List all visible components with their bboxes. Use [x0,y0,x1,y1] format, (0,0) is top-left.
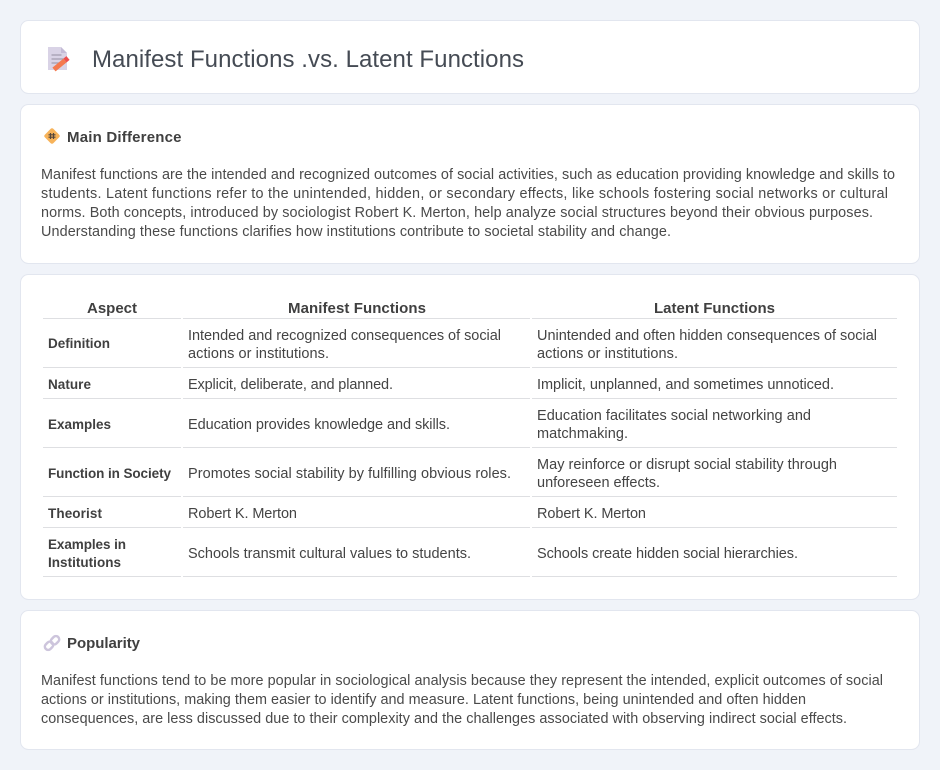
panel: comparison table [20,274,920,600]
row: definition: actions or institutions. [537,346,678,362]
heading: main difference: Main Difference [67,129,182,146]
row: examples [48,408,811,442]
row: theorist: Robert K. Merton [188,506,297,522]
row: examples in institutions: Schools transmit cultural values to students. [188,546,471,562]
text block: popularity paragraph [41,673,883,727]
panel: title header [20,20,920,94]
row: definition: Unintended and often hidden consequences of social [537,328,877,344]
text block: main difference paragraph: Manifest functions are the intended and recognized outcomes of social activities, such as education providing knowledge and skills to [41,167,895,183]
row: examples: matchmaking. [537,426,628,442]
text block: main difference paragraph [41,167,895,240]
row: examples: Education facilitates social networking and [537,408,811,424]
text block: main difference paragraph: Understanding these functions clarifies how institutions contribute to societal stability and change. [41,224,671,240]
panel: popularity [20,610,920,750]
panel: main difference [20,104,920,264]
text block: popularity paragraph: Manifest functions tend to be more popular in sociological analysis because they represent the intended, explicit outcomes of social [41,673,883,689]
text block: main difference paragraph: students. Latent functions refer to the unintended, hidden, or secondary effects, like schools fostering social networks or cultural [41,186,888,202]
text block: popularity paragraph: consequences, are less discussed due to their complexity and the challenges associated with observing indirect social effects. [41,711,847,727]
table header [87,300,775,317]
table header: Manifest Functions [288,300,426,317]
icon: diamond sign [44,128,60,144]
row: nature: Implicit, unplanned, and sometimes unnoticed. [537,377,834,393]
row: function in society: Promotes social stability by fulfilling obvious roles. [188,466,511,482]
row: examples in institutions: Institutions [48,555,121,570]
text block: main difference paragraph: norms. Both concepts, introduced by sociologist Robert K. Merton, help analyze social structures beyond their obvious purposes. [41,205,873,221]
row: definition [48,328,877,362]
row: examples in institutions: Examples in [48,537,126,552]
row: nature: Nature [48,377,91,392]
row: theorist [48,506,646,522]
row: function in society [48,457,837,491]
row: examples: Education provides knowledge and skills. [188,417,450,433]
row: function in society: May reinforce or disrupt social stability through [537,457,837,473]
row: examples in institutions [48,537,798,570]
row: theorist: Theorist [48,506,102,521]
text block: popularity paragraph: actions or institutions, making them easier to identify and measure. Latent functions, being unintended and often hidden [41,692,806,708]
row: theorist: Robert K. Merton [537,506,646,522]
table header: Latent Functions [654,300,775,317]
row: nature: Explicit, deliberate, and planned. [188,377,393,393]
row: definition: Definition [48,336,110,351]
heading: popularity: Popularity [67,635,141,652]
row: definition: actions or institutions. [188,346,329,362]
table header: Aspect [87,300,137,317]
row: function in society: unforeseen effects. [537,475,660,491]
icon: chain link [44,635,61,651]
row: examples: Examples [48,417,111,432]
icon: document with pencil [48,47,68,70]
row: nature [48,377,834,393]
row: definition: Intended and recognized consequences of social [188,328,501,344]
row: examples in institutions: Schools create hidden social hierarchies. [537,546,798,562]
row: function in society: Function in Society [48,466,171,481]
title: Manifest Functions .vs. Latent Functions [92,46,524,73]
